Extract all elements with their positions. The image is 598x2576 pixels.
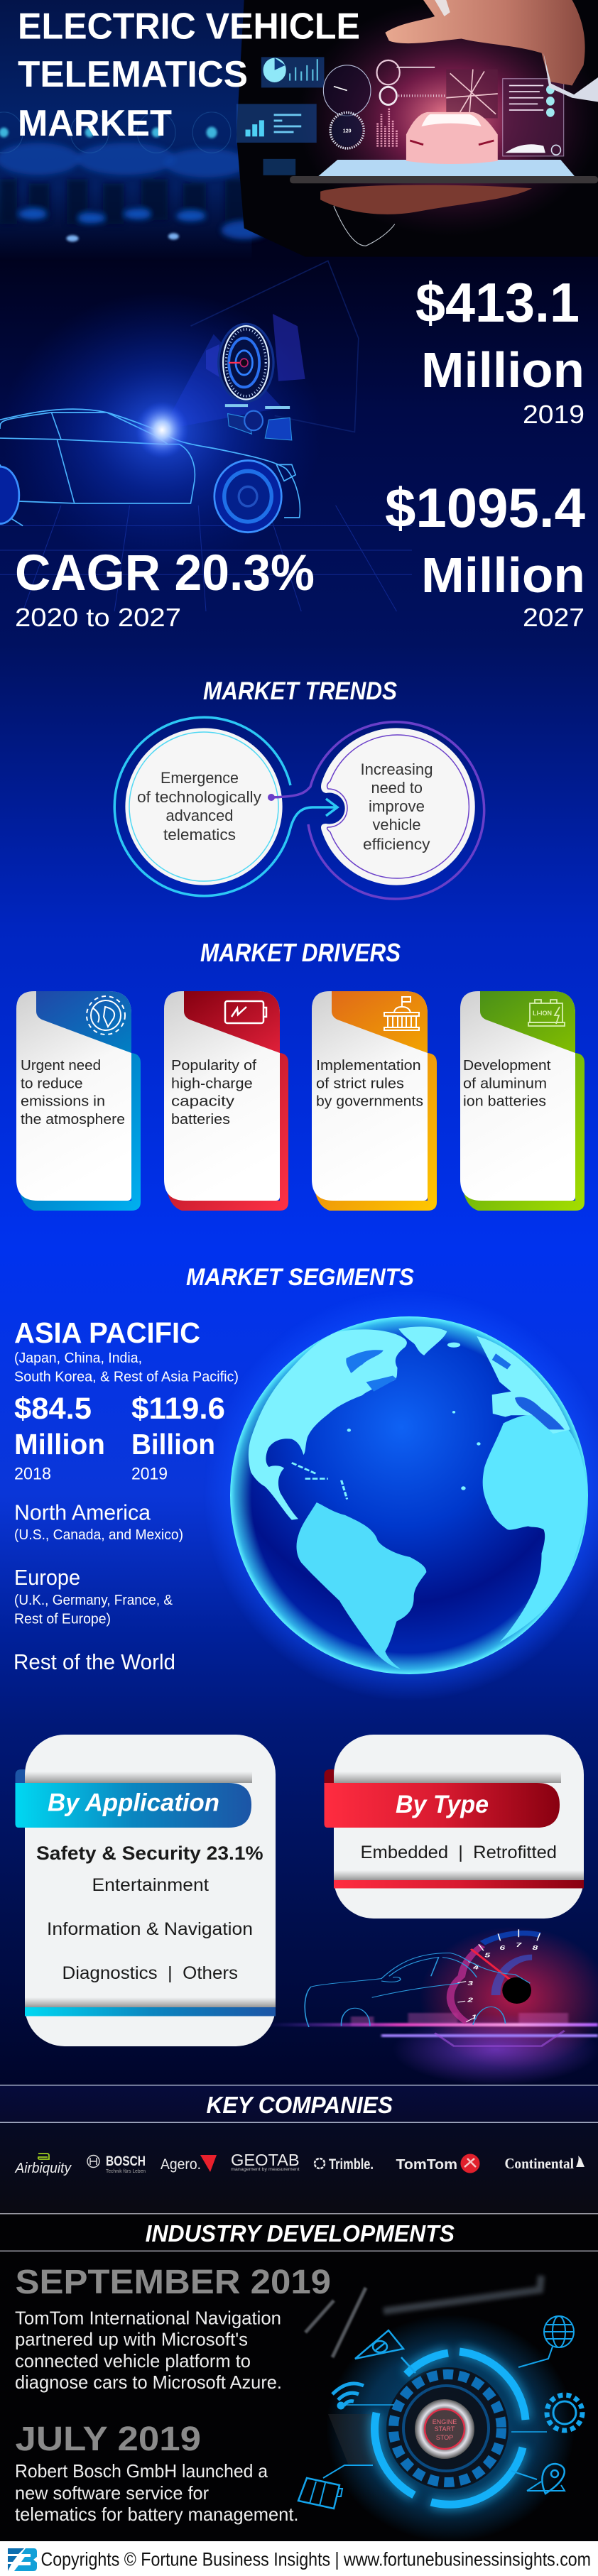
stat: 2027 market value — [385, 476, 585, 632]
engine start button: ENGINE — [433, 2418, 457, 2425]
title: MARKET — [18, 103, 172, 144]
text block: September 2019 development: partnered up with Microsoft's — [15, 2329, 248, 2350]
stat: 2019 market value: Million — [421, 342, 585, 398]
panel: by type — [324, 1735, 584, 1919]
card: popularity of high-charge batteries: capacity — [171, 1093, 234, 1109]
region: Europe — [14, 1565, 173, 1627]
title: TELEMATICS — [18, 54, 248, 95]
illustration: car outline and rev gauge: 3 — [467, 1980, 474, 1987]
stat: 2027 market value: Million — [421, 547, 585, 603]
card: popularity of high-charge batteries: Popularity of — [171, 1058, 256, 1074]
hero image: hand holding tablet over city — [0, 0, 598, 261]
icon: globe — [518, 2316, 574, 2367]
illustration: car outline and rev gauge: 2 — [467, 1997, 474, 2004]
footer — [0, 2541, 598, 2576]
illustration: car outline and rev gauge — [267, 1926, 598, 2085]
panel: by application: Entertainment — [92, 1875, 209, 1895]
ribbon: by application — [16, 1769, 251, 1828]
panel: market trends circles — [114, 717, 484, 899]
logo: TomTom: TomTom — [396, 2157, 457, 2173]
circle: vehicle efficiency: need to — [371, 779, 423, 797]
logo: Bosch: BOSCH — [106, 2154, 146, 2169]
stat: 2019 market value: 2019 — [523, 400, 585, 429]
card: urgent need to reduce emissions: emissions in — [21, 1093, 105, 1109]
panel: regional segments — [13, 1316, 239, 1674]
region: Europe: Rest of Europe) — [14, 1612, 111, 1627]
region: Asia Pacific — [14, 1316, 239, 1484]
text block: July 2019 development: Robert Bosch GmbH launched a — [15, 2460, 268, 2482]
card: development of aluminum ion batteries: LI-ION — [533, 1010, 552, 1017]
logo: Trimble — [315, 2156, 374, 2173]
circle: vehicle efficiency — [268, 722, 484, 899]
circle: emergence of telematics: of technologically — [137, 788, 261, 806]
text block: September 2019 development: TomTom International Navigation — [15, 2308, 281, 2329]
region: Asia Pacific: 2018 — [14, 1464, 51, 1484]
card: popularity of high-charge batteries — [164, 991, 288, 1211]
band: industry developments — [0, 2213, 598, 2541]
region: Europe: Europe — [14, 1565, 80, 1590]
stat: 2019 market value: $413.1 — [415, 271, 580, 334]
stat: 2019 market value — [415, 271, 585, 429]
text block: July 2019 development: new software service for — [15, 2482, 209, 2504]
card: popularity of high-charge batteries: batteries — [171, 1112, 230, 1128]
hero left blue city backdrop — [0, 0, 267, 261]
region: Asia Pacific: Million — [14, 1428, 105, 1461]
region: Asia Pacific: Billion — [131, 1428, 215, 1461]
text block: July 2019 development: telematics for battery management. — [15, 2504, 298, 2525]
region: Europe: (U.K., Germany, France, & — [14, 1593, 173, 1608]
logo: Bosch: Technik fürs Leben — [106, 2168, 146, 2174]
illustration: car outline and rev gauge: 6 — [499, 1945, 506, 1951]
region: Asia Pacific: South Korea, & Rest of Asia Pacific) — [14, 1369, 239, 1385]
illustration: car outline and rev gauge: 8 — [533, 1945, 538, 1951]
logo: Geotab: GEOTAB — [231, 2151, 300, 2169]
ribbon: by type — [324, 1769, 560, 1828]
illustration: wireframe car with headlight and speedometer — [0, 261, 412, 611]
panel: by application: Information & Navigation — [47, 1919, 253, 1939]
illustration: car outline and rev gauge: 7 — [516, 1942, 522, 1948]
text block: September 2019 development: diagnose cars to Microsoft Azure. — [15, 2372, 282, 2393]
heading: market drivers: MARKET DRIVERS — [200, 938, 401, 967]
region: Asia Pacific: ASIA PACIFIC — [14, 1316, 200, 1349]
icon: car battery — [528, 1000, 565, 1026]
text block: September 2019 development: SEPTEMBER 2019 — [16, 2264, 331, 2301]
region: Rest of the World: Rest of the World — [13, 1649, 175, 1674]
illustration: car outline and rev gauge: 5 — [484, 1952, 491, 1959]
ribbon: by application: By Application — [48, 1789, 219, 1817]
card: development of aluminum ion batteries — [460, 991, 585, 1211]
logo: Agero: Agero. — [161, 2156, 201, 2173]
ribbon: by type: By Type — [396, 1791, 489, 1818]
card: implementation of strict rules — [312, 991, 437, 1211]
heading: key companies: KEY COMPANIES — [206, 2092, 393, 2118]
circle: emergence of telematics: advanced — [166, 807, 233, 824]
text block: July 2019 development: JULY 2019 — [16, 2421, 201, 2458]
panel: market drivers cards — [16, 991, 585, 1211]
circle: vehicle efficiency: Increasing — [361, 760, 433, 778]
title: ELECTRIC VEHICLE — [18, 6, 360, 47]
card: urgent need to reduce emissions: to reduce — [21, 1076, 82, 1092]
engine start button: START — [435, 2425, 455, 2433]
logo: Airbiquity: Airbiquity — [15, 2161, 72, 2176]
card: development of aluminum ion batteries: ion batteries — [463, 1093, 546, 1109]
icon: battery — [225, 1001, 266, 1023]
card: urgent need to reduce emissions: Urgent need — [21, 1058, 101, 1074]
glowing ring arcs — [375, 2352, 526, 2504]
icon: battery — [298, 2465, 373, 2509]
panel: by application — [16, 1735, 276, 2046]
illustration: car outline and rev gauge: 4 — [472, 1964, 479, 1971]
card: popularity of high-charge batteries: high-charge — [171, 1076, 253, 1092]
circle: emergence of telematics: telematics — [163, 826, 236, 844]
hero right suit and tablet scene: 120 — [343, 127, 351, 134]
stat: CAGR: CAGR 20.3% — [15, 545, 315, 601]
card: urgent need to reduce emissions: the atmosphere — [21, 1112, 125, 1128]
engine start button: STOP — [436, 2434, 453, 2441]
hero right suit and tablet scene — [237, 0, 598, 257]
card: development of aluminum ion batteries: Development — [463, 1058, 551, 1074]
region: Asia Pacific: 2019 — [131, 1464, 168, 1484]
heading: market segments: MARKET SEGMENTS — [186, 1264, 414, 1291]
headline stats — [15, 271, 585, 632]
stat: 2027 market value: $1095.4 — [385, 476, 585, 539]
panel: by application: Diagnostics | Others — [62, 1963, 238, 1983]
stat: CAGR — [15, 545, 315, 632]
region: Asia Pacific: (Japan, China, India, — [14, 1350, 142, 1366]
title — [18, 6, 360, 144]
text block: July 2019 development — [15, 2421, 298, 2525]
panel: by application: Safety & Security 23.1% — [36, 1843, 263, 1864]
card: implementation of strict rules: of strict rules — [316, 1076, 404, 1092]
circle: emergence of telematics: Emergence — [161, 769, 239, 787]
engine start button — [415, 2399, 474, 2459]
logo: Bosch — [87, 2154, 146, 2174]
heading: industry developments: INDUSTRY DEVELOPMENTS — [146, 2220, 455, 2247]
stat: 2027 market value: 2027 — [523, 603, 585, 632]
card: implementation of strict rules: Implementation — [316, 1058, 421, 1074]
panel: company logos — [0, 2123, 598, 2213]
region: North America: (U.S., Canada, and Mexico) — [14, 1527, 183, 1543]
region: Asia Pacific: $119.6 — [131, 1392, 225, 1426]
stat: CAGR: 2020 to 2027 — [15, 603, 181, 632]
text block: September 2019 development: connected vehicle platform to — [15, 2350, 251, 2372]
footer logo — [8, 2548, 37, 2571]
card: implementation of strict rules: by governments — [316, 1093, 423, 1109]
logo: Airbiquity — [15, 2154, 72, 2176]
region: North America: North America — [14, 1500, 151, 1525]
region: North America — [14, 1500, 183, 1543]
icon: wifi — [332, 2384, 394, 2408]
circle: vehicle efficiency: efficiency — [363, 835, 430, 853]
icon: globe — [87, 996, 125, 1035]
logo: TomTom — [396, 2154, 480, 2173]
card: development of aluminum ion batteries: of aluminum — [463, 1076, 547, 1092]
logo: Trimble: Trimble. — [329, 2156, 374, 2173]
illustration: glowing globe — [203, 1289, 598, 1701]
circle: emergence of telematics — [114, 717, 337, 896]
logo: Continental: Continental — [504, 2155, 574, 2172]
icon: government building — [384, 997, 419, 1030]
icon: gear — [511, 2395, 582, 2432]
band: key companies — [0, 2085, 598, 2123]
circle: vehicle efficiency: improve — [369, 797, 425, 815]
logo: Geotab: management by measurement — [231, 2167, 300, 2172]
card: urgent need to reduce emissions — [16, 991, 141, 1211]
region: Asia Pacific: $84.5 — [14, 1392, 92, 1426]
circle: vehicle efficiency: vehicle — [372, 816, 420, 834]
panel: by type: Embedded | Retrofitted — [361, 1843, 557, 1862]
continents — [249, 1326, 587, 1669]
text block: September 2019 development — [15, 2264, 331, 2393]
icon: location pin — [511, 2464, 565, 2494]
heading: market trends: MARKET TRENDS — [203, 677, 397, 705]
icon: warning triangle — [355, 2330, 415, 2373]
illustration: engine start button with connected icons — [298, 2276, 582, 2542]
illustration: car outline and rev gauge: 1 — [472, 2014, 477, 2021]
